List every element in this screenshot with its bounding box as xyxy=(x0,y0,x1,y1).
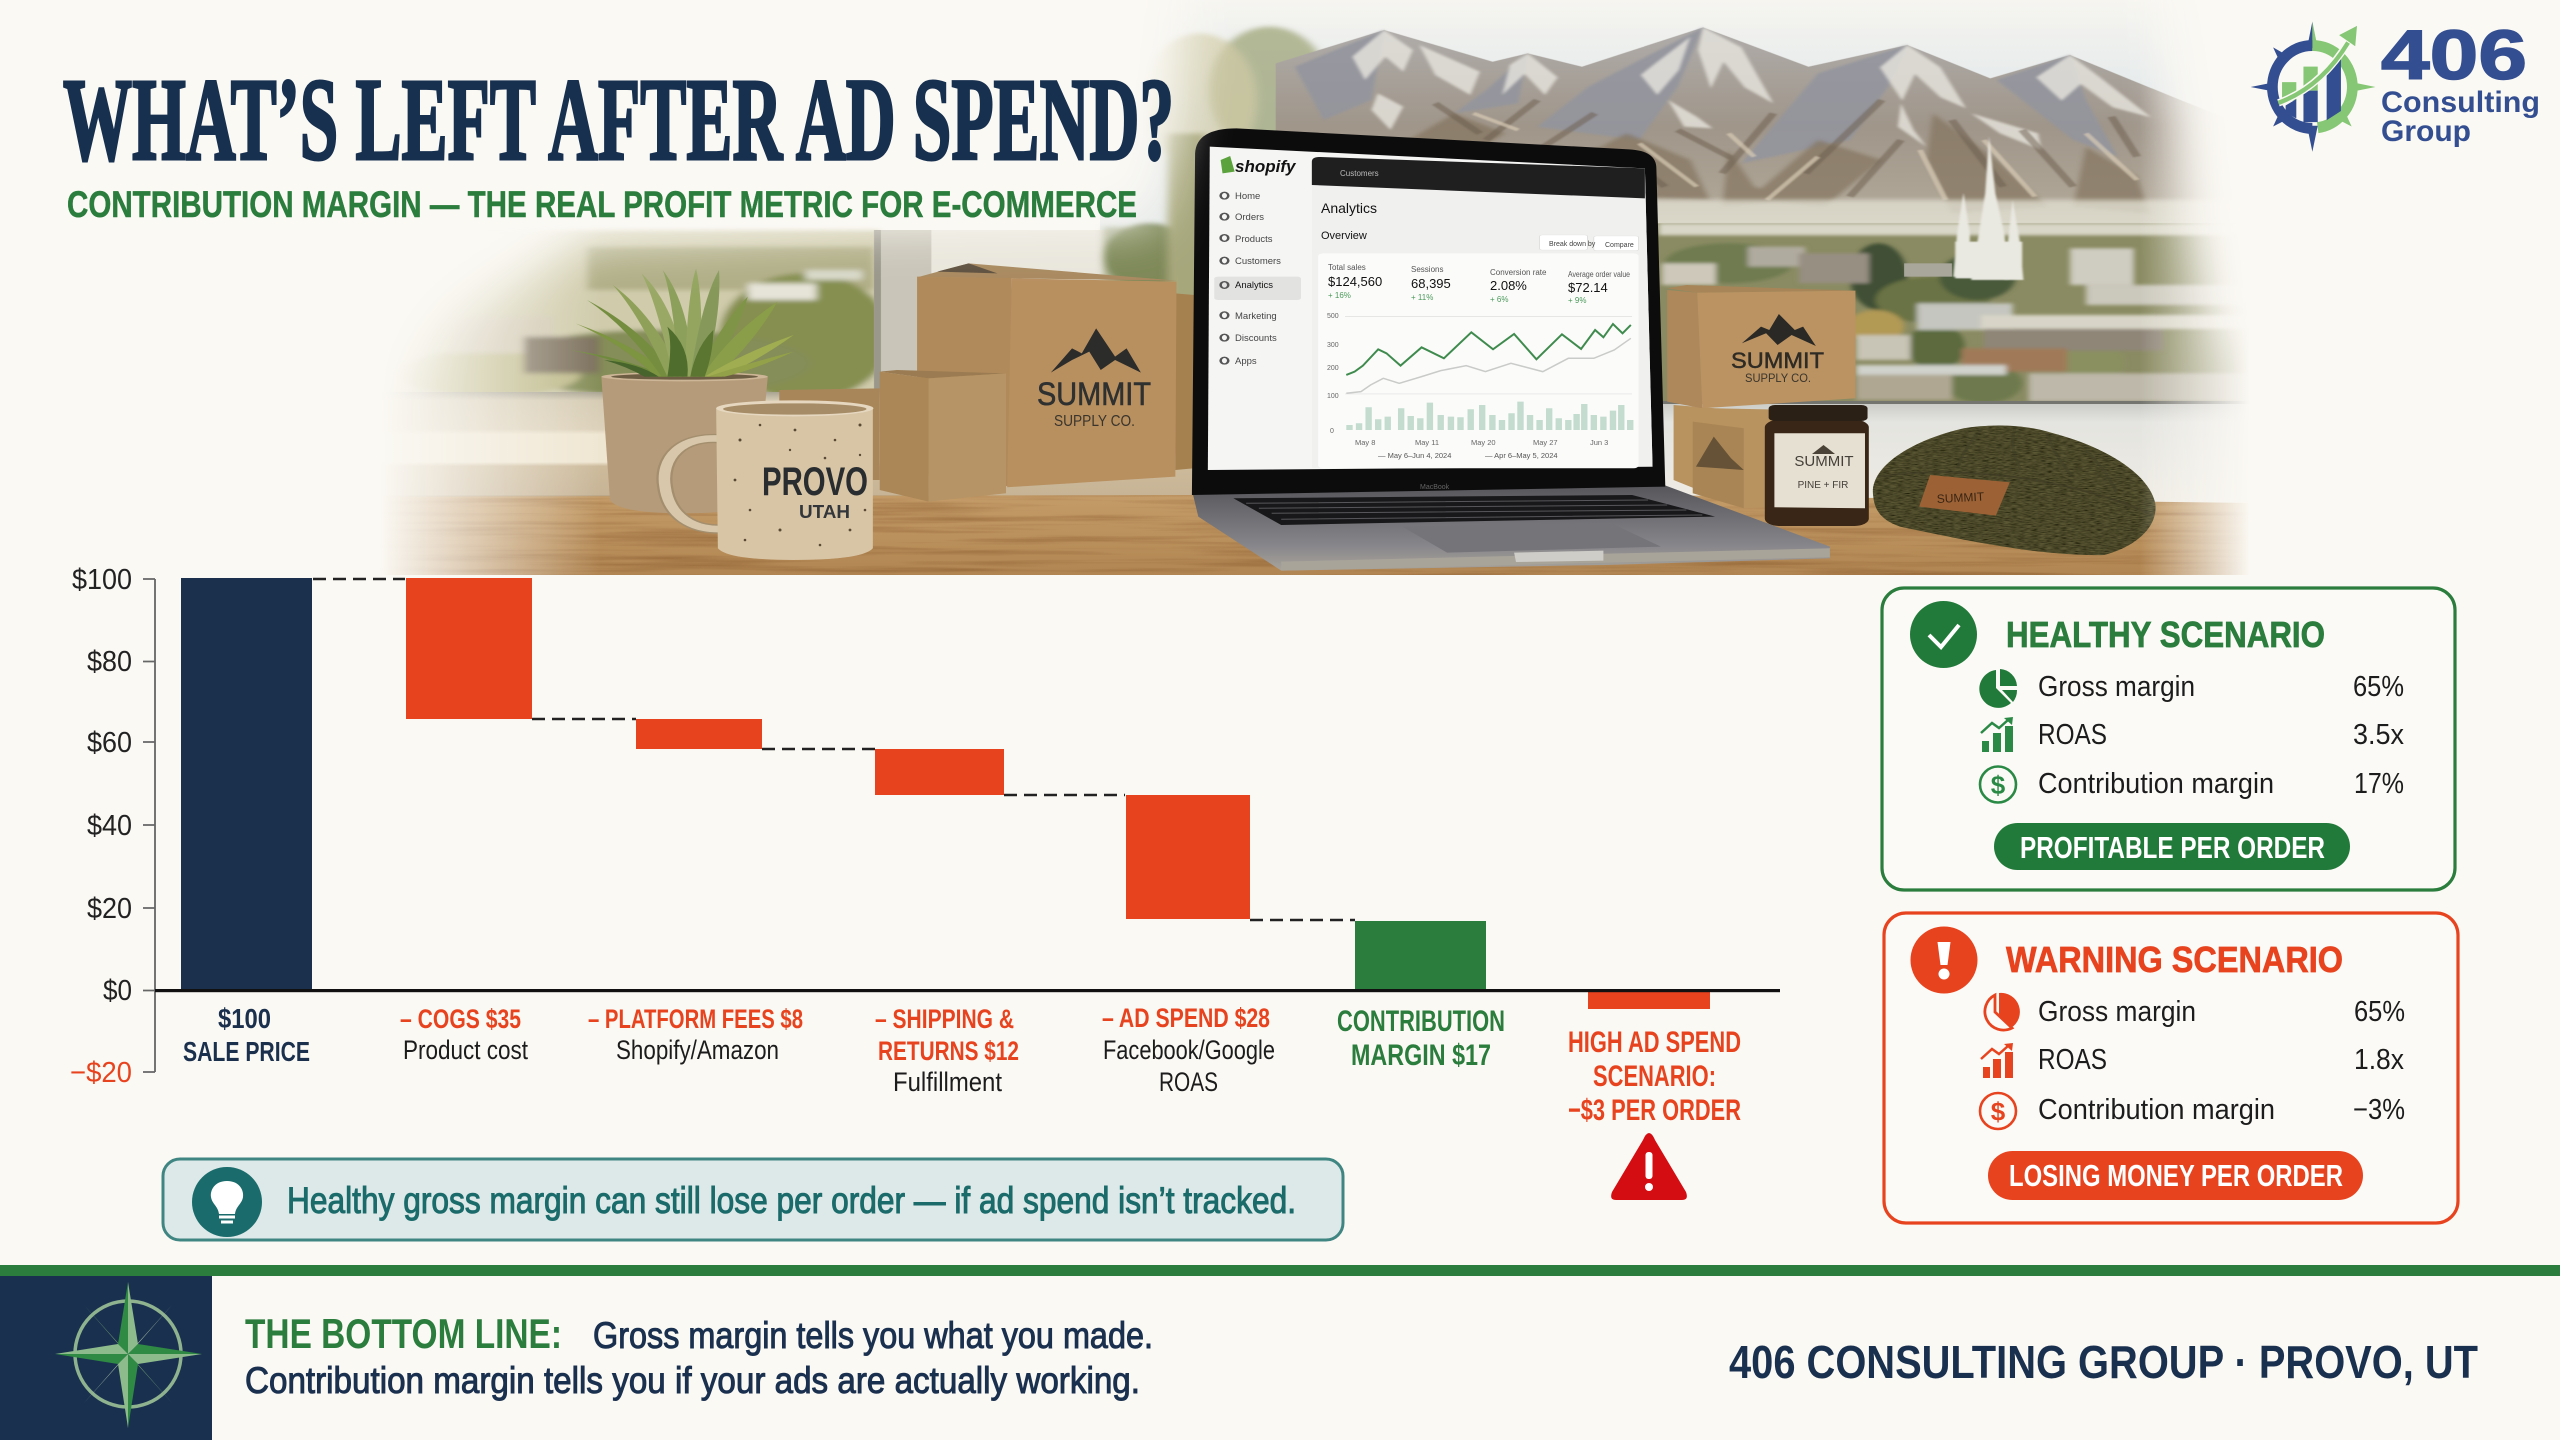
hero photo: desk with laptop and mountain view xyxy=(390,16,2245,575)
right stacked boxes: SUMMIT xyxy=(1731,348,1824,373)
y axis with ticks and labels: $40 xyxy=(87,810,132,842)
label: ad spend: – AD SPEND $28 xyxy=(1102,1003,1270,1033)
icon: dollar circle: $ xyxy=(1991,770,2006,800)
mug: Provo Utah: UTAH xyxy=(799,502,850,522)
cardboard boxes: Summit Supply Co.: SUPPLY CO. xyxy=(1054,413,1135,430)
label: platform fees xyxy=(588,1004,803,1065)
label: ad spend xyxy=(1102,1003,1275,1097)
mug: Provo Utah xyxy=(664,400,873,560)
cardboard boxes: Summit Supply Co.: SUMMIT xyxy=(1037,376,1151,412)
dashboard text: Apps xyxy=(1235,356,1257,367)
dashboard text: + 9% xyxy=(1568,296,1586,305)
dashboard text: Total sales xyxy=(1328,263,1366,272)
row: gross margin xyxy=(2038,671,2404,703)
panel: warning scenario xyxy=(1884,913,2458,1223)
dashboard text: 0 xyxy=(1330,428,1334,435)
badge: losing money per order: LOSING MONEY PER ORDER xyxy=(2009,1158,2343,1193)
bar: sale price xyxy=(181,578,312,990)
label: high ad spend scenario: SCENARIO: xyxy=(1593,1060,1716,1093)
candle jar xyxy=(1765,405,1869,526)
label: platform fees: – PLATFORM FEES $8 xyxy=(588,1004,803,1034)
icon: dollar circle xyxy=(1980,766,2016,802)
dashboard text: May 27 xyxy=(1533,438,1558,447)
dashboard text: 100 xyxy=(1327,393,1339,400)
icon: compass rose xyxy=(55,1282,202,1428)
row: gross margin: 65% xyxy=(2354,996,2405,1028)
dashboard text: 300 xyxy=(1327,342,1339,349)
label: COGS xyxy=(400,1004,528,1065)
row: gross margin: Gross margin xyxy=(2038,671,2195,703)
logo compass mark xyxy=(2251,21,2376,152)
row: gross margin: 65% xyxy=(2353,671,2404,703)
badge: losing money per order xyxy=(1988,1151,2363,1200)
y axis with ticks and labels: $80 xyxy=(87,646,132,678)
dashboard text: Analytics xyxy=(1321,200,1377,216)
row: contribution margin: −3% xyxy=(2353,1094,2405,1126)
bar: COGS xyxy=(406,578,532,719)
dashboard text: 2.08% xyxy=(1490,278,1527,293)
laptop xyxy=(1192,128,1830,571)
row: contribution margin: 17% xyxy=(2354,768,2404,800)
dashboard text: Average order value xyxy=(1568,270,1630,279)
heading: WARNING SCENARIO xyxy=(2006,939,2343,980)
icon: growth bars xyxy=(1981,1043,2013,1078)
icon: dollar circle: $ xyxy=(1991,1096,2006,1126)
label: contribution margin: MARGIN $17 xyxy=(1351,1039,1491,1072)
icon: light bulb xyxy=(192,1167,262,1237)
candle jar: SUMMIT xyxy=(1794,453,1854,470)
label: COGS: Product cost xyxy=(403,1035,528,1065)
dashboard text: + 11% xyxy=(1411,293,1433,302)
valley haze xyxy=(1657,197,2194,222)
row: gross margin xyxy=(2038,996,2405,1028)
dashboard text: — May 6–Jun 4, 2024 xyxy=(1378,451,1451,460)
y axis with ticks and labels: $100 xyxy=(72,564,132,596)
icon: warning triangle xyxy=(1611,1133,1687,1200)
icon: alert badge xyxy=(1910,926,1978,994)
sales trend chart lines xyxy=(1346,324,1631,393)
label: high ad spend scenario: HIGH AD SPEND xyxy=(1568,1026,1741,1059)
dashboard text: Customers xyxy=(1235,256,1281,267)
row: contribution margin xyxy=(2038,768,2404,800)
left window scenery xyxy=(404,220,1174,392)
row: gross margin: Gross margin xyxy=(2038,996,2196,1028)
label: ad spend: ROAS xyxy=(1159,1067,1218,1097)
laptop body xyxy=(1192,128,1830,571)
bar: platform fees xyxy=(636,719,762,749)
bottom line text: THE BOTTOM LINE: xyxy=(245,1310,562,1357)
dashboard text: + 6% xyxy=(1490,295,1508,304)
heading: HEALTHY SCENARIO xyxy=(2006,614,2325,655)
bar: ad spend xyxy=(1126,795,1250,919)
title: WHAT’S LEFT AFTER AD SPEND? xyxy=(63,54,1174,185)
knit beanie with leather patch: SUMMIT xyxy=(1936,490,1985,506)
dashboard text: Conversion rate xyxy=(1490,268,1547,277)
logo: 406 Consulting Group: Group xyxy=(2381,115,2471,148)
dashboard text: Break down by xyxy=(1549,241,1596,248)
row: ROAS: ROAS xyxy=(2038,719,2107,751)
dashboard text: 200 xyxy=(1327,365,1339,372)
plant in ceramic pot xyxy=(570,268,794,513)
mug: Provo Utah: PROVO xyxy=(762,460,868,504)
bar: shipping and returns xyxy=(875,749,1004,795)
dashboard text: 68,395 xyxy=(1411,276,1451,291)
label: high ad spend scenario: −$3 PER ORDER xyxy=(1568,1094,1741,1127)
dashboard text: MacBook xyxy=(1420,484,1450,491)
dashboard text: Compare xyxy=(1605,242,1634,249)
bottom line text xyxy=(245,1310,1153,1401)
dashboard text: Marketing xyxy=(1235,311,1277,322)
subtitle: CONTRIBUTION MARGIN — THE REAL PROFIT METRIC FOR E-COMMERCE xyxy=(67,184,1137,225)
city view with temple xyxy=(1658,138,2242,401)
row: contribution margin: Contribution margin xyxy=(2038,768,2274,800)
daily bars xyxy=(1346,402,1633,430)
label: shipping and returns xyxy=(875,1004,1019,1097)
right stacked boxes: SUPPLY CO. xyxy=(1745,371,1811,385)
y axis with ticks and labels: $60 xyxy=(87,727,132,759)
candle jar: PINE + FIR xyxy=(1798,480,1848,491)
dashboard text: May 8 xyxy=(1355,438,1375,447)
dashboard text: $124,560 xyxy=(1328,274,1382,289)
bar: high ad spend scenario xyxy=(1588,992,1710,1009)
label: high ad spend scenario xyxy=(1568,1026,1741,1127)
row: ROAS: 3.5x xyxy=(2353,719,2404,751)
badge: profitable per order xyxy=(1994,823,2350,870)
label: platform fees: Shopify/Amazon xyxy=(616,1035,779,1065)
dashboard text: Analytics xyxy=(1235,280,1273,291)
logo: 406 Consulting Group: 406 xyxy=(2381,16,2527,94)
window sills xyxy=(394,392,2240,502)
label: ad spend: Facebook/Google xyxy=(1103,1035,1275,1065)
y axis with ticks and labels xyxy=(70,564,155,1089)
bar: contribution margin xyxy=(1355,921,1486,990)
row: ROAS xyxy=(2038,719,2404,751)
y axis with ticks and labels: $0 xyxy=(103,975,132,1007)
dashboard text: + 16% xyxy=(1328,291,1351,300)
knit beanie with leather patch xyxy=(1873,425,2156,555)
bottom line text: Contribution margin tells you if your ads are actually working. xyxy=(245,1360,1140,1401)
y axis with ticks and labels: $20 xyxy=(87,893,132,925)
mountains xyxy=(1276,27,2206,224)
label: sale price: $100 xyxy=(218,1003,271,1034)
dashboard text xyxy=(1235,157,1634,491)
icon: check badge xyxy=(1910,601,1977,668)
bottom line text: Gross margin tells you what you made. xyxy=(593,1315,1153,1356)
dashboard text: Overview xyxy=(1321,230,1367,242)
badge: profitable per order: PROFITABLE PER ORDER xyxy=(2020,830,2325,865)
icon: dollar circle xyxy=(1980,1093,2016,1129)
label: contribution margin xyxy=(1337,1005,1505,1072)
connector dashes xyxy=(313,579,1355,920)
dashboard text: May 20 xyxy=(1471,438,1496,447)
icon: pie outline xyxy=(1985,993,2020,1030)
label: shipping and returns: – SHIPPING & xyxy=(875,1004,1014,1034)
icon: pie xyxy=(1979,669,2017,708)
label: sale price: SALE PRICE xyxy=(183,1036,310,1067)
dashboard text: Discounts xyxy=(1235,333,1277,344)
footer band xyxy=(0,1265,2560,1440)
row: contribution margin: Contribution margin xyxy=(2038,1094,2275,1126)
background tree xyxy=(1155,24,1322,295)
row: ROAS: ROAS xyxy=(2038,1044,2107,1076)
label: shipping and returns: RETURNS $12 xyxy=(878,1036,1019,1066)
logo: 406 Consulting Group: Consulting xyxy=(2381,86,2540,119)
dashboard text: Products xyxy=(1235,234,1273,245)
logo: 406 Consulting Group xyxy=(2251,16,2540,152)
callout: healthy gross margin: Healthy gross margin can still lose per order — if ad spend isn’t tracked. xyxy=(287,1180,1296,1221)
dashboard text: Customers xyxy=(1340,169,1379,178)
dashboard text: Sessions xyxy=(1411,265,1443,274)
row: ROAS: 1.8x xyxy=(2354,1044,2404,1076)
y axis with ticks and labels: −$20 xyxy=(70,1057,132,1089)
icon: growth bars xyxy=(1981,717,2013,752)
dashboard text: May 11 xyxy=(1415,438,1439,447)
row: contribution margin xyxy=(2038,1094,2405,1126)
dashboard text: shopify xyxy=(1235,157,1297,176)
dashboard text: 500 xyxy=(1327,313,1339,320)
sky xyxy=(1100,16,2176,230)
zero axis line xyxy=(155,989,1780,992)
dashboard text: $72.14 xyxy=(1568,280,1608,295)
label: COGS: – COGS $35 xyxy=(400,1004,521,1034)
waterfall chart xyxy=(70,564,1780,1200)
row: ROAS xyxy=(2038,1044,2404,1076)
cardboard boxes: Summit Supply Co. xyxy=(779,263,1194,502)
dashboard text: — Apr 6–May 5, 2024 xyxy=(1485,451,1558,460)
callout: healthy gross margin xyxy=(163,1159,1343,1240)
label: contribution margin: CONTRIBUTION xyxy=(1337,1005,1505,1038)
dashboard text: Home xyxy=(1235,191,1260,202)
panel: healthy scenario xyxy=(1882,588,2455,890)
dashboard text: Jun 3 xyxy=(1590,438,1608,447)
wooden table xyxy=(390,495,2245,575)
right stacked boxes xyxy=(1667,285,1855,508)
label: shipping and returns: Fulfillment xyxy=(893,1067,1002,1097)
dashboard text: Orders xyxy=(1235,212,1264,223)
label: sale price xyxy=(183,1003,310,1067)
